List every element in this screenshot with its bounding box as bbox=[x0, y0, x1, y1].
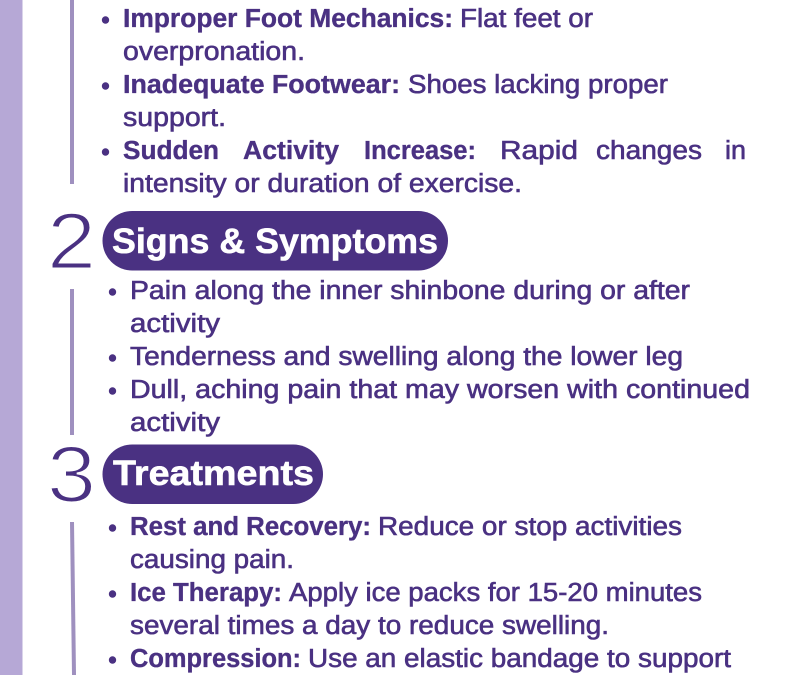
bullet: improper foot mechanics: overpronation. bbox=[123, 38, 305, 66]
heading: signs and symptoms: Signs & Symptoms bbox=[112, 222, 438, 261]
bullet: compression bbox=[109, 645, 731, 673]
bullet: pain along shinbone: activity bbox=[130, 310, 220, 338]
bullet: improper foot mechanics: Flat feet or bbox=[460, 5, 594, 33]
bullet: ice therapy bbox=[109, 579, 702, 640]
bullet: sudden activity increase: in bbox=[725, 137, 746, 165]
bullet: compression: Use an elastic bandage to support bbox=[308, 645, 731, 673]
bullet: sudden activity increase: Increase: bbox=[364, 137, 476, 165]
section 2 timeline line bbox=[70, 289, 74, 435]
bullet: tenderness: Tenderness and swelling along the lower leg bbox=[130, 343, 683, 371]
section 3 treatments list bbox=[109, 513, 731, 673]
bullet: inadequate footwear: Shoes lacking proper bbox=[408, 71, 669, 99]
bullet: rest and recovery: Rest and Recovery: bbox=[130, 513, 371, 541]
bullet: ice therapy: several times a day to reduce swelling. bbox=[130, 612, 609, 640]
bullet: rest and recovery: causing pain. bbox=[130, 546, 294, 574]
bullet: ice therapy: Ice Therapy: bbox=[130, 579, 282, 607]
section 3 timeline line bbox=[70, 522, 76, 675]
bullet: dull aching pain: Dull, aching pain that may worsen with continued bbox=[130, 376, 750, 404]
section 1 causes list bbox=[102, 5, 746, 198]
number 3: 3 bbox=[47, 430, 96, 518]
bullet: inadequate footwear: support. bbox=[123, 104, 226, 132]
section 2 symptoms list bbox=[109, 277, 750, 437]
bullet: improper foot mechanics bbox=[102, 5, 594, 66]
bullet: dull aching pain bbox=[109, 376, 750, 437]
bullet: sudden activity increase: changes bbox=[596, 137, 702, 165]
bullet: ice therapy: Apply ice packs for 15-20 minutes bbox=[289, 579, 702, 607]
bullet: improper foot mechanics: Improper Foot Mechanics: bbox=[123, 5, 453, 33]
bullet: inadequate footwear bbox=[102, 71, 669, 132]
bullet: sudden activity increase bbox=[102, 137, 746, 198]
left decorative band bbox=[0, 0, 22, 675]
bullet: sudden activity increase: intensity or duration of exercise. bbox=[123, 170, 522, 198]
bullet: pain along shinbone bbox=[109, 277, 691, 338]
bullet: dull aching pain: activity bbox=[130, 409, 220, 437]
number 2: 2 bbox=[47, 196, 96, 286]
bullet: pain along shinbone: Pain along the inner shinbone during or after bbox=[130, 277, 691, 305]
heading: signs and symptoms bbox=[102, 211, 448, 270]
heading: treatments bbox=[102, 444, 323, 504]
bullet: sudden activity increase: Activity bbox=[243, 137, 340, 165]
bullet: rest and recovery bbox=[109, 513, 682, 574]
bullet: sudden activity increase: Sudden bbox=[123, 137, 219, 165]
section 1 timeline line bbox=[70, 0, 74, 184]
bullet: rest and recovery: Reduce or stop activities bbox=[378, 513, 682, 541]
bullet: sudden activity increase: Rapid bbox=[500, 137, 578, 165]
bullet: compression: Compression: bbox=[130, 645, 301, 673]
heading: treatments: Treatments bbox=[113, 454, 314, 493]
bullet: inadequate footwear: Inadequate Footwear: bbox=[123, 71, 400, 99]
